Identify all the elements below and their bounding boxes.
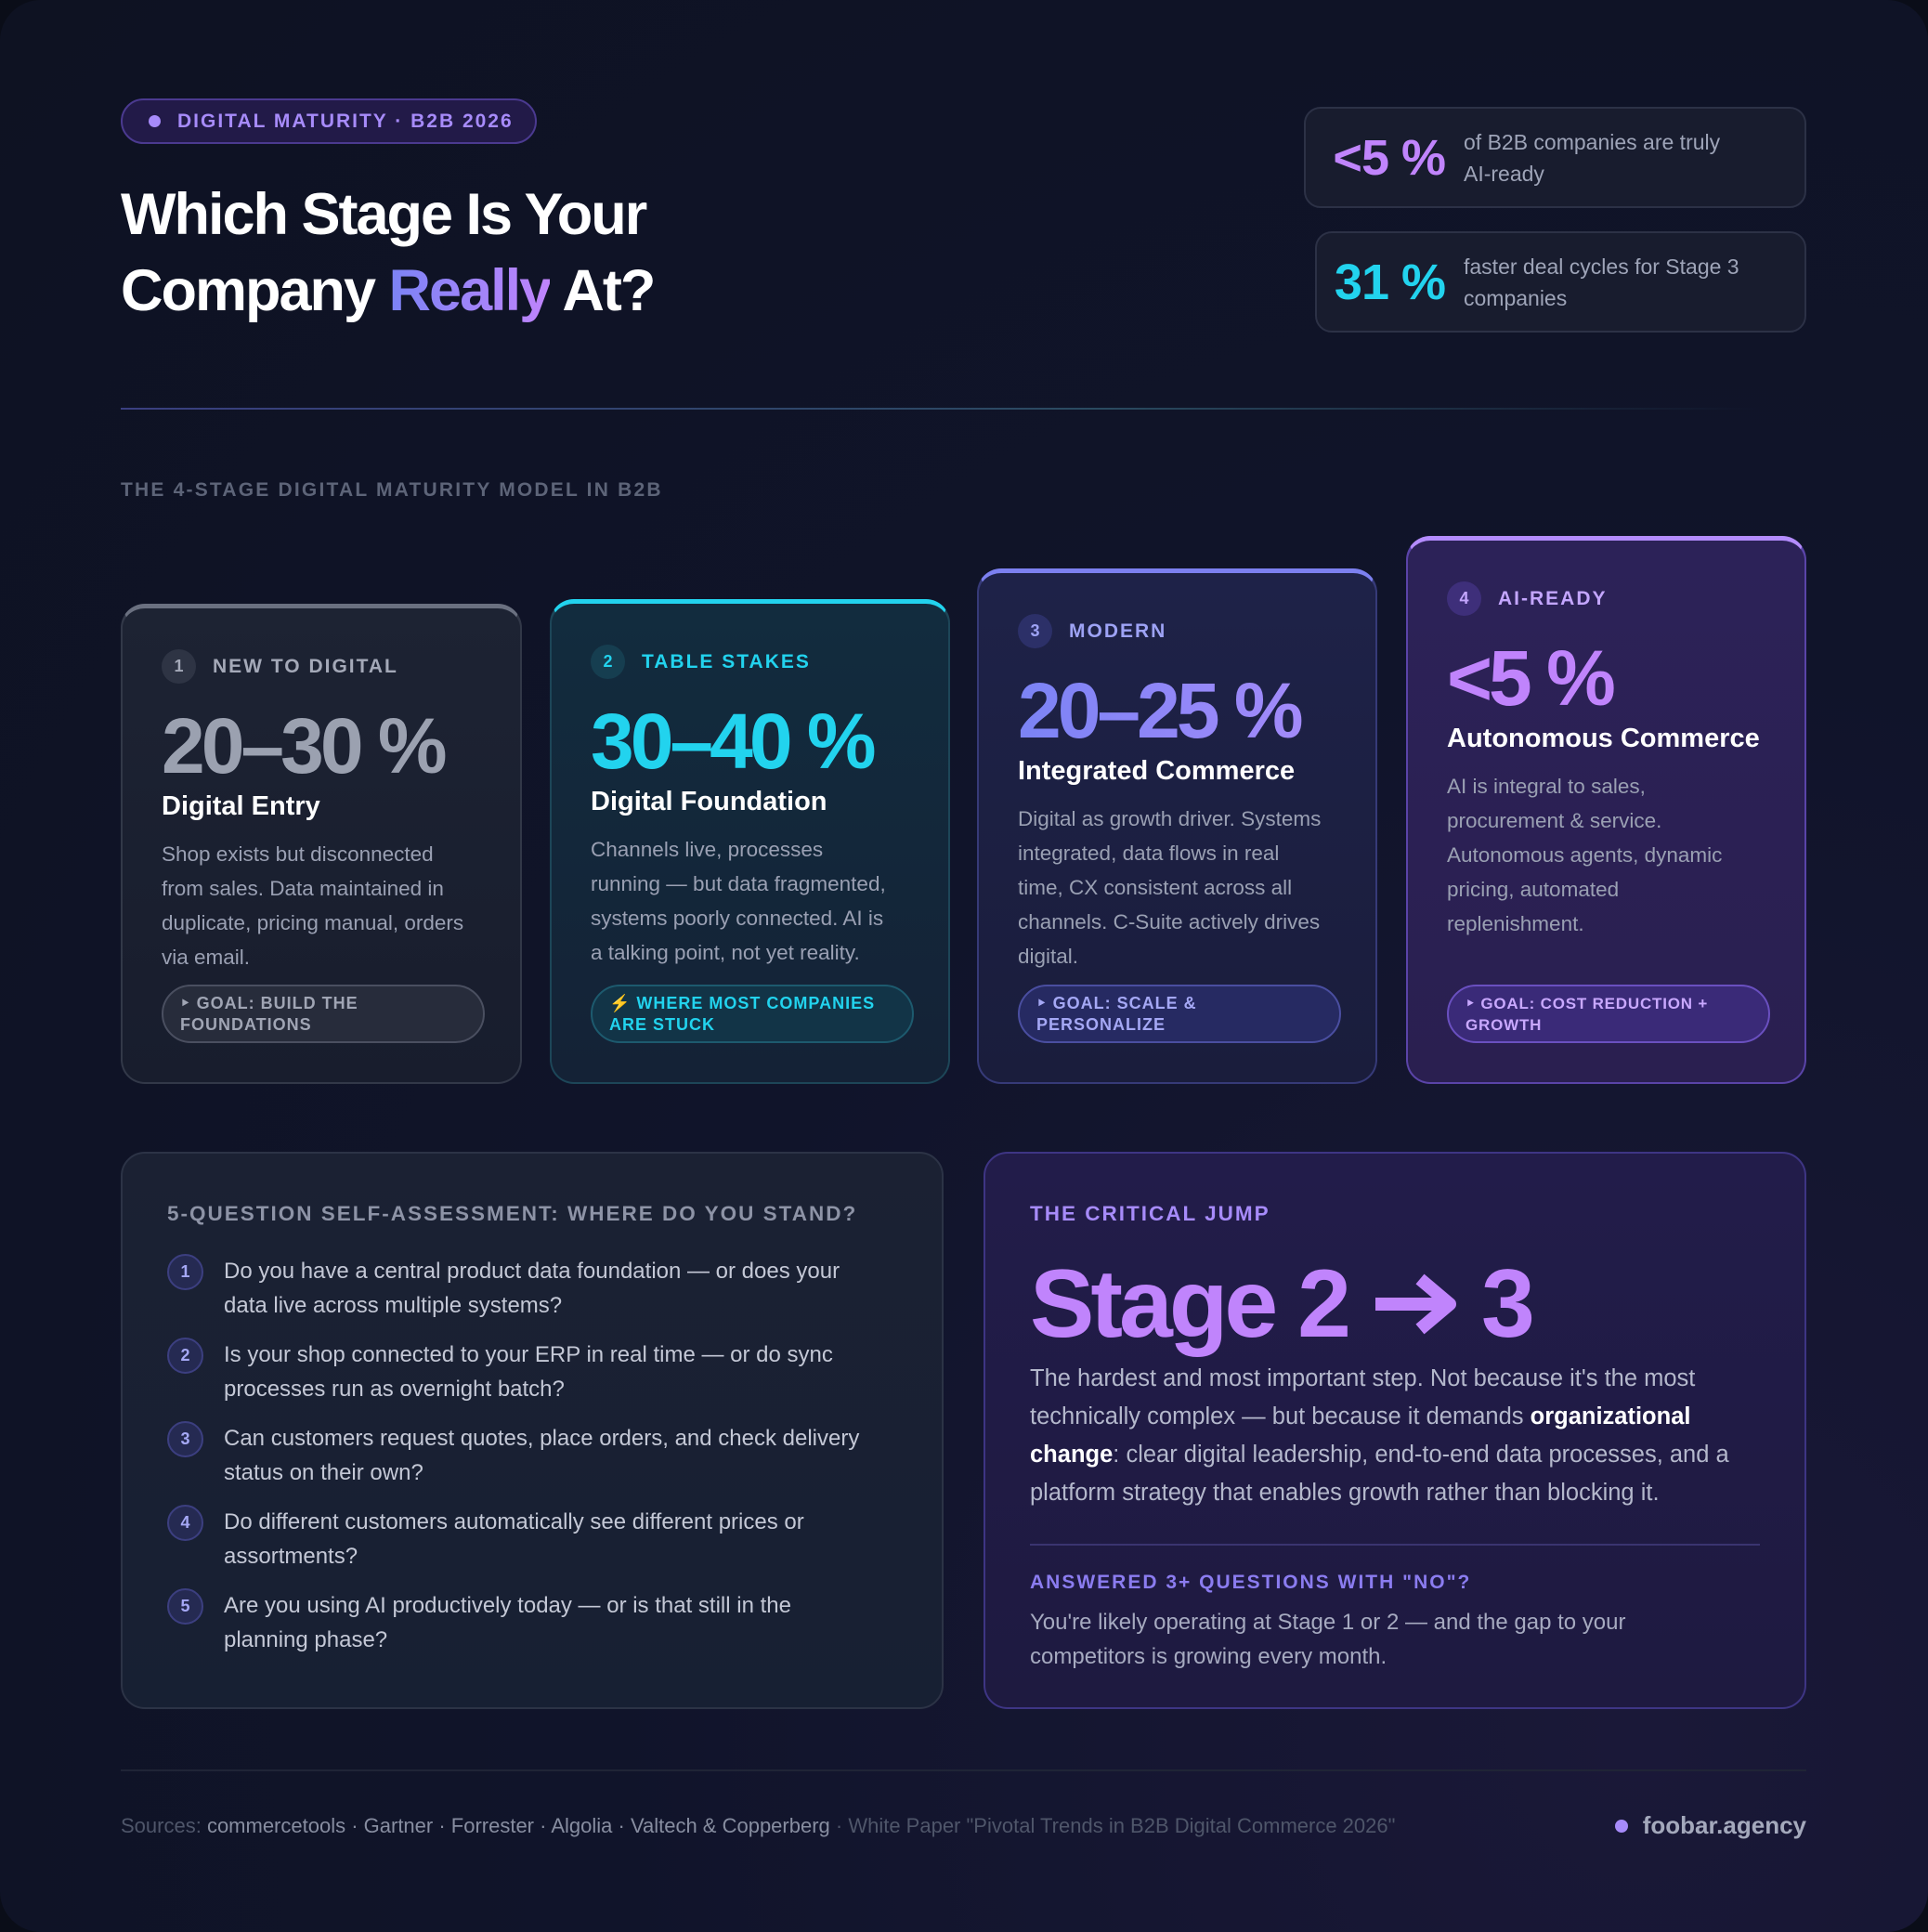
- tag pill: DIGITAL MATURITY · B2B 2026: [177, 110, 514, 132]
- card 4: 4: [1459, 589, 1469, 607]
- stat box: 31%: faster deal cycles for Stage 3: [1464, 255, 1739, 279]
- title: [121, 182, 654, 323]
- sources footer: Sources: commercetools · Gartner · Forrester · Algolia · Valtech & Copperberg · White Paper "Pivotal Trends in B2B Digital Commerce 2026": [121, 1814, 1395, 1837]
- title: Company Really At?: [121, 258, 654, 323]
- card 3: 3: [1030, 621, 1040, 640]
- card 3: ‣ GOAL: SCALE &: [1036, 994, 1197, 1012]
- callout heading: ANSWERED 3+ QUESTIONS WITH "NO"?: [1030, 1572, 1471, 1593]
- card 1: FOUNDATIONS: [180, 1014, 312, 1033]
- tag pill: [121, 98, 537, 144]
- card 4: <5 %: [1447, 634, 1612, 722]
- brand: foobar.agency: [1643, 1811, 1806, 1839]
- question 5: Are you using AI productively today — or is that still in the planning phase?: [224, 1593, 791, 1652]
- card 1: ‣ GOAL: BUILD THE: [180, 994, 358, 1012]
- stat box: under 5%: [1304, 107, 1806, 208]
- panel: self-assessment: [121, 1152, 944, 1709]
- card 2: ⚡ WHERE MOST COMPANIES: [609, 994, 875, 1012]
- card 3: Digital as growth driver. Systems integrated, data flows in real time, CX consistent across all channels. C-Suite actively drives digital.: [1018, 807, 1321, 968]
- card 2: [550, 599, 950, 1084]
- card 1: Shop exists but disconnected from sales. Data maintained in duplicate, pricing manual, orders via email.: [162, 842, 463, 969]
- card 2: 2: [603, 652, 613, 671]
- card 4: [1406, 536, 1806, 1084]
- card 4: AI is integral to sales, procurement & service. Autonomous agents, dynamic pricing, automated replenishment.: [1447, 775, 1722, 935]
- big stage label: Stage 2 3: [1030, 1250, 1531, 1358]
- card 3: MODERN: [1069, 620, 1166, 641]
- heading: self-assessment: 5-QUESTION SELF-ASSESSMENT: WHERE DO YOU STAND?: [167, 1202, 857, 1225]
- question 1: 1: [180, 1262, 189, 1281]
- title: Which Stage Is Your: [121, 182, 645, 247]
- stat box: 31%: 31 %: [1335, 255, 1445, 310]
- card 4: Autonomous Commerce: [1447, 724, 1760, 753]
- question 3: 3: [180, 1429, 189, 1448]
- card 1: [121, 604, 522, 1084]
- stat box: under 5%: <5 %: [1333, 130, 1445, 186]
- callout text: You're likely operating at Stage 1 or 2 — and the gap to your competitors is growing every month.: [1030, 1610, 1625, 1669]
- card 2: Channels live, processes running — but data fragmented, systems poorly connected. AI is a talking point, not yet reality.: [591, 838, 886, 964]
- card 3: PERSONALIZE: [1036, 1014, 1166, 1033]
- card 2: 30–40 %: [591, 698, 873, 785]
- section label: THE 4-STAGE DIGITAL MATURITY MODEL IN B2B: [121, 479, 663, 501]
- stat box: 31%: [1315, 231, 1806, 333]
- heading: critical jump: THE CRITICAL JUMP: [1030, 1202, 1270, 1225]
- card 1: Digital Entry: [162, 791, 320, 821]
- card 3: 20–25 %: [1018, 667, 1300, 754]
- question 2: Is your shop connected to your ERP in real time — or do sync processes run as overnight batch?: [224, 1342, 833, 1402]
- question 5: 5: [180, 1597, 189, 1615]
- card 2: Digital Foundation: [591, 787, 827, 816]
- question 3: Can customers request quotes, place orders, and check delivery status on their own?: [224, 1426, 859, 1485]
- stat box: under 5%: of B2B companies are truly: [1464, 130, 1720, 154]
- stat box: under 5%: AI-ready: [1464, 162, 1544, 186]
- stat box: 31%: companies: [1464, 286, 1567, 310]
- question 2: 2: [180, 1346, 189, 1364]
- panel: critical jump: [984, 1152, 1806, 1709]
- question 1: Do you have a central product data foundation — or does your data live across multiple systems?: [224, 1259, 840, 1318]
- card 2: TABLE STAKES: [642, 650, 811, 672]
- card 3: [977, 568, 1377, 1084]
- question 4: 4: [180, 1513, 189, 1532]
- question 4: Do different customers automatically see different prices or assortments?: [224, 1509, 804, 1569]
- body text: The hardest and most important step. Not because it's the most technically complex — but because it demands organizational change: clear digital leadership, end-to-end data processes, and a platform strategy that enables growth rather than blocking it.: [1030, 1365, 1729, 1506]
- card 4: AI-READY: [1498, 587, 1608, 609]
- card 1: NEW TO DIGITAL: [213, 656, 398, 676]
- card 3: Integrated Commerce: [1018, 756, 1295, 786]
- card 1: 1: [174, 657, 184, 675]
- card 4: GROWTH: [1466, 1016, 1542, 1033]
- card 4: ‣ GOAL: COST REDUCTION +: [1466, 994, 1708, 1012]
- card 2: ARE STUCK: [609, 1014, 715, 1033]
- card 1: 20–30 %: [162, 702, 444, 790]
